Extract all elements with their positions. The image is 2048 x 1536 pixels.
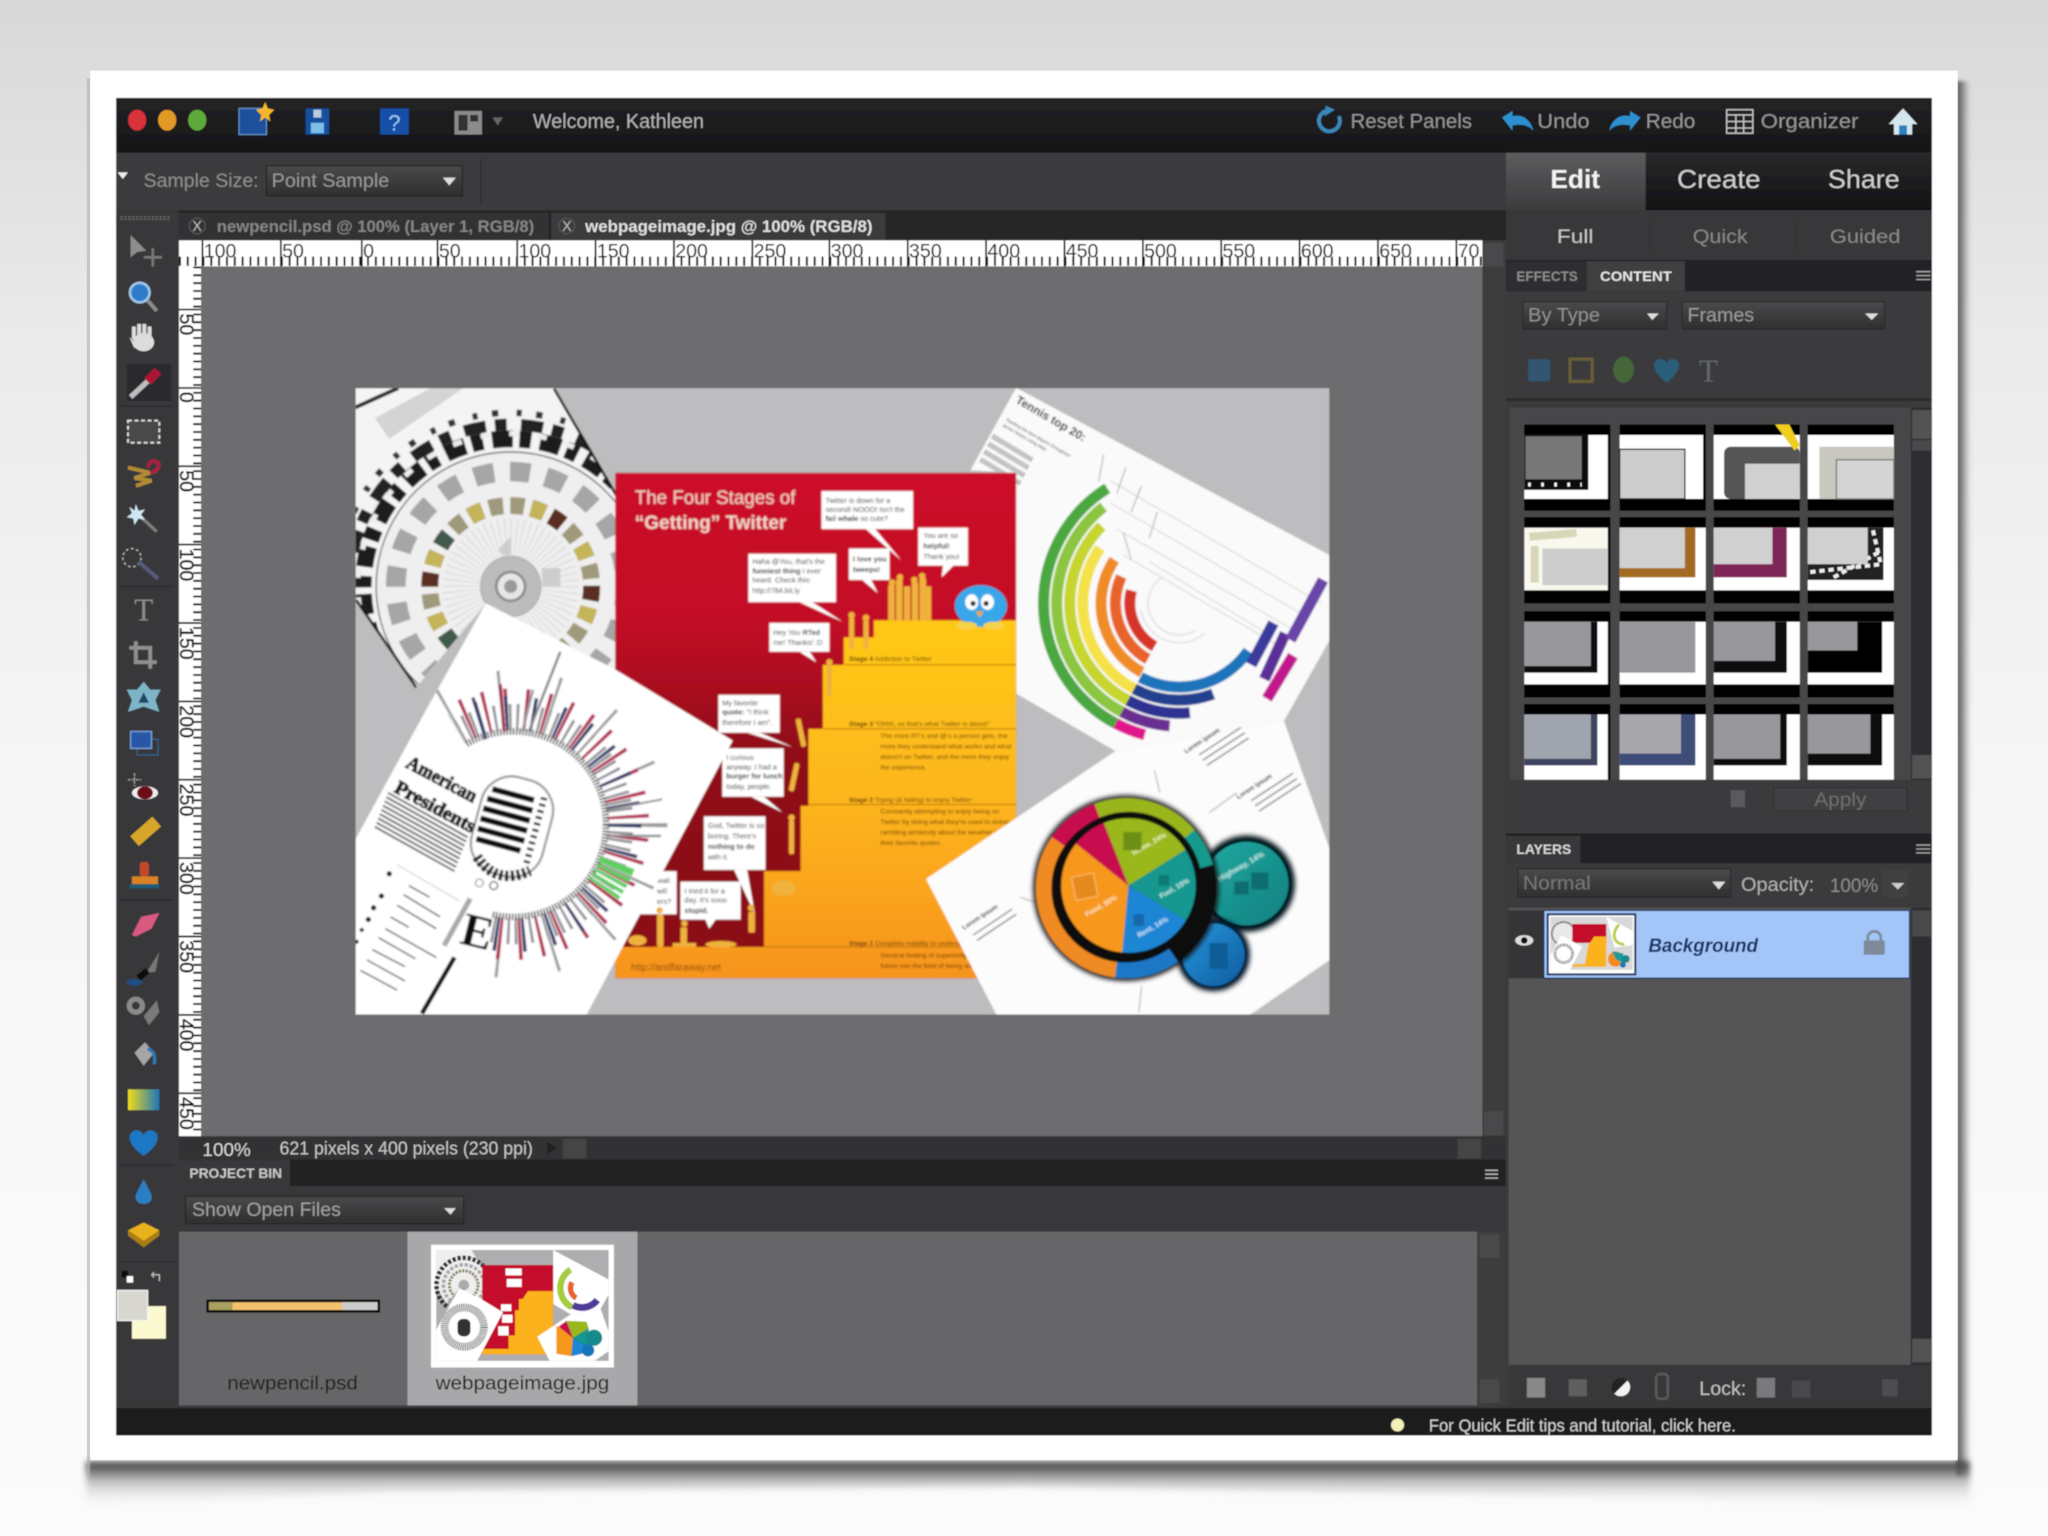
left ruler: 350 bbox=[175, 940, 197, 973]
left ruler: 400 bbox=[175, 1019, 197, 1052]
pie outer glow bbox=[1033, 795, 1219, 981]
infographic: tennis top 20 bbox=[970, 388, 1330, 752]
bubble: funniest: funniest thing I ever bbox=[752, 566, 821, 575]
show open files dropdown bbox=[185, 1196, 464, 1224]
options bar bbox=[116, 153, 1506, 210]
tool: move bbox=[131, 235, 162, 266]
effects and content tabs: EFFECTS bbox=[1516, 269, 1578, 284]
top ruler bbox=[179, 240, 1482, 266]
top ruler: 50 bbox=[282, 240, 304, 262]
pie icons bbox=[1071, 832, 1169, 926]
left ruler: 450 bbox=[175, 1097, 197, 1130]
left ruler: 300 bbox=[175, 862, 197, 895]
poster url: http://andfaraway.net bbox=[631, 962, 721, 973]
reset panels label: Reset Panels bbox=[1351, 111, 1472, 133]
frame cell 6 bbox=[1620, 517, 1706, 603]
stage labels: Stage 2 Trying (& failing) to enjoy Twitter bbox=[849, 797, 972, 804]
infographic: american presidents bbox=[354, 603, 747, 1021]
top ruler: 100 bbox=[519, 240, 551, 262]
bubble: retweet bbox=[769, 623, 829, 662]
bubble: boring: God, Twitter is so bbox=[708, 821, 764, 830]
tool: eraser bbox=[132, 913, 159, 936]
icon: save bbox=[306, 108, 329, 135]
frames scrollbar bbox=[1911, 408, 1932, 780]
pie labels: Home, 24% bbox=[1131, 831, 1168, 857]
stage labels bbox=[849, 656, 1012, 970]
infographic: mandala wheel bbox=[354, 387, 618, 689]
infographic: four stages of getting twitter bbox=[615, 473, 1016, 978]
crowd at the top bbox=[888, 573, 931, 620]
left ruler: 150 bbox=[175, 627, 197, 660]
bubble: retweet: me! Thanks! :D bbox=[773, 638, 823, 647]
top ruler: 100 bbox=[204, 240, 237, 262]
frame cell 10 bbox=[1620, 611, 1706, 697]
pie labels: Rent, 14% bbox=[1136, 915, 1170, 940]
frame cell 13 bbox=[1524, 704, 1610, 780]
poster title: “Getting” Twitter bbox=[635, 513, 787, 534]
bubble: funniest: Haha @You, that's the bbox=[752, 557, 825, 566]
sample size label: Sample Size: bbox=[144, 171, 259, 192]
welcome text: Welcome, Kathleen bbox=[533, 111, 704, 133]
icon: home bbox=[1889, 108, 1917, 135]
speech bubbles bbox=[640, 491, 968, 929]
sub tabs: Full bbox=[1557, 226, 1593, 248]
icon: new document bbox=[239, 102, 274, 135]
top ruler: 0 bbox=[363, 240, 374, 262]
rainbow arc chart bbox=[1037, 483, 1329, 741]
left ruler: 0 bbox=[175, 392, 197, 403]
top ruler: 400 bbox=[987, 240, 1020, 262]
bottom status bar bbox=[116, 1408, 1932, 1436]
thumbnail: newpencil bbox=[206, 1300, 380, 1313]
left ruler: 50 bbox=[175, 313, 197, 335]
canvas area bbox=[201, 266, 1482, 1136]
tool: blur drop bbox=[136, 1179, 152, 1204]
presidents body copy bbox=[375, 793, 468, 871]
background colour swatch bbox=[132, 1306, 166, 1339]
teal bubble: Highway, 14% bbox=[1216, 850, 1266, 883]
opacity control bbox=[1741, 870, 1908, 897]
bubble: burger bbox=[722, 748, 784, 812]
bubble: partly hidden: will bbox=[656, 886, 667, 895]
bubble: funniest: http://784.bit.ly bbox=[752, 586, 800, 595]
icon: undo bbox=[1502, 111, 1533, 131]
tool: zoom bbox=[130, 283, 157, 311]
blend mode dropdown bbox=[1518, 869, 1731, 897]
pie wedges bbox=[1019, 784, 1228, 993]
layer name: Background bbox=[1648, 935, 1759, 957]
tool: gradient bbox=[128, 1089, 159, 1110]
bubble: boring: boring. There's bbox=[708, 832, 757, 841]
bubble: helpful: You are so bbox=[923, 531, 958, 540]
presidents list bbox=[354, 865, 460, 990]
frame cell 7 bbox=[1714, 517, 1800, 603]
right panel bbox=[1506, 153, 1932, 1408]
bubble: boring: nothing to do bbox=[708, 842, 755, 851]
bubble: fail whale: fail whale so cute? bbox=[825, 514, 888, 523]
tool: healing bandage bbox=[135, 822, 157, 841]
tools dock bbox=[116, 210, 179, 1408]
tool: heart bbox=[130, 1130, 158, 1156]
top ruler: 350 bbox=[909, 240, 942, 262]
tool: shape star bbox=[127, 682, 161, 712]
top ruler: 200 bbox=[675, 240, 708, 262]
tab: webpageimage.jpg: X bbox=[562, 219, 572, 235]
bubble: tweeps: tweeps! bbox=[853, 565, 880, 574]
apply row bbox=[1731, 788, 1907, 811]
tool: selection brush bbox=[123, 549, 158, 579]
tab: newpencil.psd: X bbox=[192, 219, 202, 235]
pie labels: Fuel, 15% bbox=[1158, 877, 1191, 900]
tool: eyedropper selected bbox=[127, 364, 171, 401]
content type icons: T bbox=[1699, 353, 1718, 388]
presidents title: Presidents bbox=[391, 777, 479, 838]
icon: help: ? bbox=[388, 111, 401, 136]
lock label: Lock: bbox=[1699, 1379, 1746, 1400]
stage labels: their favorite quotes. bbox=[880, 840, 942, 847]
layers panel header: LAYERS bbox=[1516, 842, 1571, 857]
stage labels: rambling aimlessly about the weather and bbox=[880, 830, 1006, 837]
pie labels bbox=[1084, 831, 1191, 940]
top ruler: 70 bbox=[1458, 240, 1480, 262]
microphone stand: E bbox=[456, 903, 499, 961]
frame cell 5 bbox=[1524, 517, 1610, 603]
bubble: tried it: I tried it for a bbox=[684, 886, 726, 895]
bubble: tried it: stupid. bbox=[684, 906, 708, 915]
project bin bbox=[179, 1160, 1506, 1405]
tool: magic wand bbox=[127, 504, 157, 532]
bubble: favorite quote: My favorite bbox=[722, 698, 758, 707]
redo label: Redo bbox=[1646, 111, 1695, 133]
frame cell 1 bbox=[1524, 424, 1610, 511]
poster title bbox=[635, 488, 796, 534]
bubble: burger: today, people. bbox=[726, 782, 772, 791]
tool: red eye bbox=[128, 773, 158, 799]
tab: webpageimage.jpg: webpageimage.jpg @ 100% (RGB/8) bbox=[584, 218, 872, 236]
lorem ipsum labels: Lorem ipsum bbox=[1235, 773, 1274, 801]
frame cell 8 bbox=[1808, 517, 1894, 603]
frame cell 16 bbox=[1808, 704, 1894, 780]
top ruler: 600 bbox=[1301, 240, 1334, 262]
tool: marquee bbox=[128, 421, 159, 443]
bubble: burger: anyway. I had a bbox=[726, 762, 778, 771]
presidents title: American bbox=[403, 753, 481, 807]
left ruler bbox=[175, 266, 201, 1136]
left ruler: 50 bbox=[175, 470, 197, 492]
status bar bbox=[179, 1136, 1506, 1160]
content filter dropdowns: Frames bbox=[1688, 305, 1754, 326]
frame cell 11 bbox=[1714, 611, 1800, 697]
apply row: Apply bbox=[1814, 790, 1867, 811]
stage labels: Twitter by doing what they're used to doing: bbox=[880, 819, 1011, 826]
frame cell 14 bbox=[1620, 704, 1706, 780]
top ruler: 550 bbox=[1223, 240, 1255, 262]
outer ring bbox=[1010, 772, 1242, 1004]
tab share: Share bbox=[1828, 164, 1900, 194]
bubble: retweet: Hey You RTed bbox=[773, 628, 820, 637]
bubble: tweeps: I love you bbox=[853, 555, 887, 564]
bubble: fail whale: Twitter is down for a bbox=[825, 496, 891, 505]
poster title: The Four Stages of bbox=[635, 488, 796, 509]
vertical canvas scrollbar bbox=[1482, 240, 1506, 1136]
sample size dropdown: Point Sample bbox=[272, 171, 389, 192]
icon: layout bbox=[455, 111, 503, 135]
frame cell 12 bbox=[1808, 611, 1894, 697]
tab: newpencil.psd bbox=[179, 213, 549, 240]
bubble: burger: I curious bbox=[726, 753, 754, 762]
bubble: tweeps bbox=[849, 549, 889, 593]
stage labels: the experience. bbox=[880, 764, 927, 771]
top ruler: 650 bbox=[1379, 240, 1412, 262]
tool: hand bbox=[129, 324, 154, 351]
top ruler: 500 bbox=[1144, 240, 1177, 262]
stage labels: more they understand what works and what bbox=[880, 743, 1012, 750]
tab: webpageimage.jpg bbox=[551, 213, 886, 240]
layers panel header bbox=[1506, 833, 1932, 863]
layers footer bbox=[1509, 1365, 1932, 1408]
label newpencil: newpencil.psd bbox=[227, 1373, 358, 1395]
infographic: tennis top 20: Ranking the best players throughout bbox=[1005, 417, 1072, 458]
presidents title bbox=[391, 753, 481, 838]
bubble: favorite quote bbox=[718, 695, 793, 747]
sub tabs: Quick bbox=[1693, 226, 1748, 248]
thumbnail: webpageimage bbox=[431, 1245, 614, 1368]
bubble: boring: with it. bbox=[707, 852, 729, 861]
project bin heading: PROJECT BIN bbox=[189, 1166, 282, 1181]
infographic: circular budget chart bbox=[926, 721, 1330, 1015]
tab: newpencil.psd: newpencil.psd @ 100% (Layer 1, RGB/8) bbox=[217, 218, 534, 236]
tool: brush bbox=[127, 952, 159, 985]
sample size dropdown bbox=[266, 166, 462, 196]
sub tabs bbox=[1506, 210, 1932, 260]
left ruler: 200 bbox=[175, 705, 197, 738]
frames grid bbox=[1510, 408, 1911, 780]
quick edit tip: For Quick Edit tips and tutorial, click here. bbox=[1429, 1416, 1736, 1436]
zoom percent: 100% bbox=[202, 1139, 251, 1160]
bubble: partly hidden: wait bbox=[656, 876, 670, 885]
selected layer row bbox=[1544, 910, 1910, 978]
bubble: favorite quote: quote: "I think bbox=[722, 707, 769, 716]
layers scrollbar bbox=[1911, 908, 1932, 1365]
stage labels: doesn't on Twitter, and the more they enjoy bbox=[880, 754, 1010, 761]
bubble: funniest bbox=[748, 554, 842, 622]
stage labels: Stage 4 Addiction to Twitter bbox=[849, 656, 933, 663]
layer list bbox=[1509, 908, 1911, 1365]
application window bbox=[116, 98, 1932, 1436]
effects and content tabs bbox=[1506, 260, 1932, 291]
bubble: funniest: heard. Check this: bbox=[752, 576, 811, 585]
organizer label: Organizer bbox=[1761, 111, 1859, 133]
stage labels: Stage 3 “Ohhh, so that's what Twitter is about!” bbox=[849, 721, 991, 728]
bubble: boring bbox=[704, 816, 765, 914]
twitter bird bbox=[955, 585, 1007, 630]
sub tabs: Guided bbox=[1830, 226, 1900, 248]
bubble: favorite quote: therefore I am". bbox=[722, 718, 772, 727]
foreground colour swatch bbox=[118, 1290, 148, 1320]
tool: sponge bbox=[128, 1223, 159, 1247]
infographic: tennis top 20: tennis history using data bbox=[1002, 423, 1047, 452]
left ruler: 250 bbox=[175, 784, 197, 816]
mode tabs bbox=[1506, 153, 1932, 210]
content type icons bbox=[1528, 353, 1718, 388]
stage labels: Stage 1 Complete inability to understand bbox=[849, 941, 972, 948]
blend mode dropdown: Normal bbox=[1523, 873, 1591, 894]
icon: reset panels bbox=[1319, 106, 1340, 131]
staircase bbox=[615, 620, 1016, 978]
document tabs bbox=[116, 210, 1506, 240]
frame cell 3 bbox=[1714, 424, 1800, 511]
lorem ipsum labels: Lorem ipsum bbox=[1183, 727, 1222, 755]
top ruler: 50 bbox=[439, 240, 461, 262]
lorem ipsum labels bbox=[961, 727, 1274, 932]
icon: layer eye bbox=[1515, 935, 1533, 946]
top ruler: 250 bbox=[754, 240, 786, 262]
tennis title: Tennis top 20: bbox=[1013, 394, 1088, 444]
pie labels: Food, 50% bbox=[1084, 893, 1119, 919]
tool: cookie cutter rects bbox=[131, 731, 158, 755]
bubble: tried it bbox=[680, 882, 741, 929]
bubble: helpful: helpful! bbox=[923, 542, 950, 551]
tab create: Create bbox=[1677, 164, 1761, 194]
tool: paint bucket bbox=[135, 1042, 155, 1066]
stage labels: future into the field of being an active bbox=[880, 963, 991, 970]
frame cell 2 bbox=[1620, 424, 1706, 511]
icon: layer lock bbox=[1864, 931, 1885, 955]
pie black ring bbox=[1058, 815, 1199, 956]
microphone stand bbox=[422, 879, 499, 1014]
undo label: Undo bbox=[1537, 111, 1590, 133]
opacity control: Opacity: bbox=[1741, 875, 1814, 896]
microphone bbox=[464, 769, 560, 884]
top ruler: 150 bbox=[597, 240, 630, 262]
frame cell 15 bbox=[1714, 704, 1800, 780]
tool: crop bbox=[129, 641, 157, 669]
icon: organizer bbox=[1727, 110, 1753, 133]
lorem ipsum labels: Lorem ipsum bbox=[961, 903, 999, 932]
traffic light buttons bbox=[128, 110, 206, 131]
frame cell 9 bbox=[1524, 611, 1610, 697]
bubble: fail whale bbox=[822, 491, 913, 560]
bubble: helpful: Thank you! bbox=[923, 552, 960, 561]
tool: gear and smart brush bbox=[129, 999, 159, 1025]
top ruler: 450 bbox=[1066, 240, 1099, 262]
tool: type: T bbox=[134, 592, 153, 627]
stage labels: Constantly attempting to enjoy being on bbox=[880, 809, 1000, 816]
opacity control: 100% bbox=[1830, 876, 1878, 897]
silhouettes bbox=[628, 573, 931, 948]
bubble: helpful bbox=[918, 528, 968, 577]
inner card ring bbox=[430, 505, 592, 667]
outer card ring bbox=[396, 472, 626, 701]
content filter dropdowns: By Type bbox=[1528, 305, 1600, 326]
image size: 621 pixels x 400 pixels (230 ppi) bbox=[280, 1138, 533, 1159]
icon: tip light bulb bbox=[1391, 1418, 1404, 1432]
bubble: tried it: day. It's sooo bbox=[684, 896, 727, 905]
left ruler: 100 bbox=[175, 549, 197, 581]
bubble: partly hidden bbox=[640, 871, 677, 914]
top application bar bbox=[116, 98, 1932, 153]
selected thumbnail cell bbox=[408, 1232, 637, 1405]
document image collage bbox=[337, 388, 1363, 1021]
teal bubble bbox=[1198, 835, 1295, 932]
blue bubble bbox=[1177, 918, 1250, 991]
stage labels: General feeling of superiority at what bbox=[880, 952, 991, 959]
radial bars bbox=[369, 652, 662, 969]
top ruler: 300 bbox=[831, 240, 863, 262]
icon: help bbox=[380, 108, 409, 136]
frame cell 4 bbox=[1808, 424, 1894, 511]
reset and swap colours bbox=[121, 1271, 159, 1283]
effects and content tabs: CONTENT bbox=[1600, 269, 1673, 284]
layer thumbnail bbox=[1548, 914, 1635, 974]
stage labels: The more RT's and @'s a person gets, the bbox=[880, 733, 1008, 740]
label webpageimage: webpageimage.jpg bbox=[435, 1373, 609, 1395]
tool: lasso bbox=[128, 461, 159, 486]
icon: redo bbox=[1609, 111, 1640, 131]
bubble: fail whale: second! NOOO! Isn't the bbox=[825, 505, 905, 514]
tab edit: Edit bbox=[1550, 164, 1600, 194]
bubble: partly hidden: ers? bbox=[657, 897, 671, 906]
content filter dropdowns bbox=[1523, 302, 1885, 329]
show open files dropdown: Show Open Files bbox=[192, 1200, 341, 1221]
tool: clone stamp bbox=[129, 862, 159, 888]
bubble: burger: burger for lunch bbox=[726, 771, 783, 780]
project bin scrollbar bbox=[1477, 1232, 1505, 1405]
